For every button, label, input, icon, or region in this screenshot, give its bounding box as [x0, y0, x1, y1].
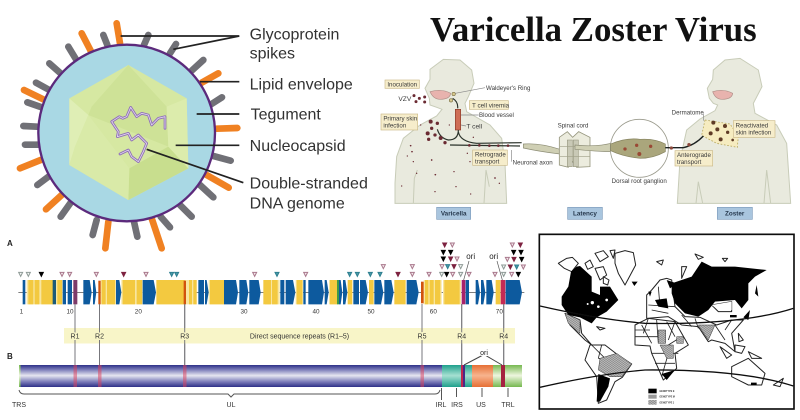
genome bar [19, 365, 522, 387]
dermatome label: Dermatome [672, 110, 704, 117]
dermatome label [672, 110, 704, 121]
callout: reactivated skin infection: skin infection [736, 130, 772, 137]
virus labels: Double-stranded [250, 176, 368, 193]
figure labels: VZV [398, 96, 412, 103]
tag: varicella: Varicella [441, 210, 467, 217]
genotype M and J regions [565, 313, 715, 377]
genome track right half: ori [466, 252, 475, 261]
callout: retrograde transport [473, 150, 507, 165]
figure labels: T cell [466, 123, 483, 130]
panel letter A: A [7, 239, 13, 248]
panel: direct sequence repeats band: R4 [499, 334, 508, 340]
virus labels: DNA genome [250, 196, 345, 213]
panel: world genotype map [539, 234, 794, 409]
map legend: GENOTYPE J [659, 402, 675, 404]
blood vessel and T cell [455, 109, 461, 130]
genome track left half: 20 [135, 309, 142, 316]
virus labels: Glycoprotein [250, 26, 339, 43]
panel: direct sequence repeats band: R1 [71, 334, 80, 340]
country borders [592, 287, 732, 377]
region brackets and ticks [19, 388, 508, 400]
anterograde arrow [665, 136, 703, 148]
genome track right half: ori [489, 252, 498, 261]
panel: direct sequence repeats band: Direct sequence repeats (R1–5) [250, 334, 349, 340]
region labels: UL [227, 402, 236, 409]
figure labels [398, 85, 553, 166]
dermatome patch [702, 120, 738, 147]
callout: inoculation: Inoculation [387, 81, 418, 88]
DNA genome [112, 107, 165, 162]
figure labels: Neuronal axon [513, 159, 553, 166]
panel: direct sequence repeats band: R2 [95, 334, 104, 340]
panel: zoster figure [575, 58, 791, 219]
virus labels: spikes [250, 46, 295, 63]
lipid envelope and tegument [38, 45, 215, 221]
genome track right half: 40 [312, 309, 320, 316]
genome track right half: 70 [496, 309, 503, 316]
dorsal root ganglion [610, 119, 668, 177]
virus labels: Lipid envelope [250, 77, 353, 94]
genotype E regions [562, 262, 767, 402]
body outline [677, 58, 791, 203]
panel: virus structure diagram [20, 23, 368, 248]
genome track left half: 10 [66, 309, 74, 316]
genome track right half: 60 [430, 309, 437, 316]
mouth [713, 90, 733, 99]
callout: primary skin infection [381, 114, 418, 130]
callout: anterograde transport: transport [677, 159, 702, 166]
region labels: IRL [436, 402, 447, 409]
tag: varicella [437, 207, 471, 219]
region labels: TRS [12, 402, 26, 409]
panel: direct sequence repeats band: R3 [180, 334, 189, 340]
callout: primary skin infection: infection [383, 122, 407, 129]
Waldeyer's ring nodes [449, 92, 455, 102]
tag: zoster [717, 207, 752, 219]
callout: retrograde transport: transport [475, 158, 500, 165]
callout: reactivated skin infection: Reactivated [736, 123, 769, 130]
panel: genome map A [7, 239, 525, 386]
map legend [648, 389, 675, 405]
genome track right half: 50 [367, 309, 375, 316]
pathway arrows [437, 98, 522, 146]
panel: varicella figure [381, 59, 553, 219]
panel: direct sequence repeats band: R4 [457, 334, 466, 340]
virus labels [250, 26, 368, 213]
lakes in genotype E area [587, 299, 732, 310]
figure labels: Blood vessel [479, 112, 514, 119]
title: Varicella Zoster Virus [430, 10, 757, 49]
panel: direct sequence repeats band: R5 [418, 334, 427, 340]
region labels: IRS [451, 402, 463, 409]
mouth [430, 90, 451, 99]
dorsal root ganglion label: Dorsal root ganglion [612, 178, 667, 185]
callout: retrograde transport: Retrograde [475, 151, 506, 158]
callout: anterograde transport: Anterograde [677, 152, 711, 159]
tag: zoster: Zoster [725, 210, 745, 217]
region labels: TRL [501, 402, 515, 409]
ori marker: ori [480, 350, 488, 357]
virus labels: Nucleocapsid [250, 138, 346, 155]
panel: spinal cord and latency [523, 122, 602, 219]
spinal cord [523, 132, 590, 167]
region labels: US [476, 402, 486, 409]
callout: T cell viremia: T cell viremia [472, 102, 510, 109]
nerve to ganglion [575, 143, 613, 152]
callout: anterograde transport [675, 151, 713, 166]
tropic lines [540, 306, 793, 387]
genome track left half: 30 [240, 309, 248, 316]
panel: genome map B [7, 350, 522, 409]
figure labels: Waldeyer's Ring [486, 85, 531, 92]
panel: direct sequence repeats band [64, 304, 515, 386]
virus particles [401, 94, 509, 195]
genome track right half [265, 243, 525, 316]
glycoprotein spikes [20, 23, 237, 248]
genome track left half [18, 272, 270, 316]
region labels [12, 402, 515, 409]
map legend: GENOTYPE M [659, 397, 675, 399]
callout: primary skin infection: Primary skin [383, 115, 418, 122]
spinal cord label: Spinal cord [558, 122, 589, 129]
body outline [395, 59, 507, 203]
genome track left half: 1 [20, 309, 24, 316]
tag: latency: Latency [573, 210, 597, 217]
continents outline [558, 250, 783, 403]
nucleocapsid [69, 65, 188, 200]
callout: reactivated skin infection [733, 121, 775, 137]
repeat connector lines [75, 304, 504, 386]
map legend: GENOTYPE E [659, 391, 675, 393]
panel letter B: B [7, 352, 13, 361]
virus labels: Tegument [251, 107, 321, 124]
ori marker [464, 350, 502, 365]
leader lines [121, 36, 243, 183]
map frame [539, 234, 794, 409]
